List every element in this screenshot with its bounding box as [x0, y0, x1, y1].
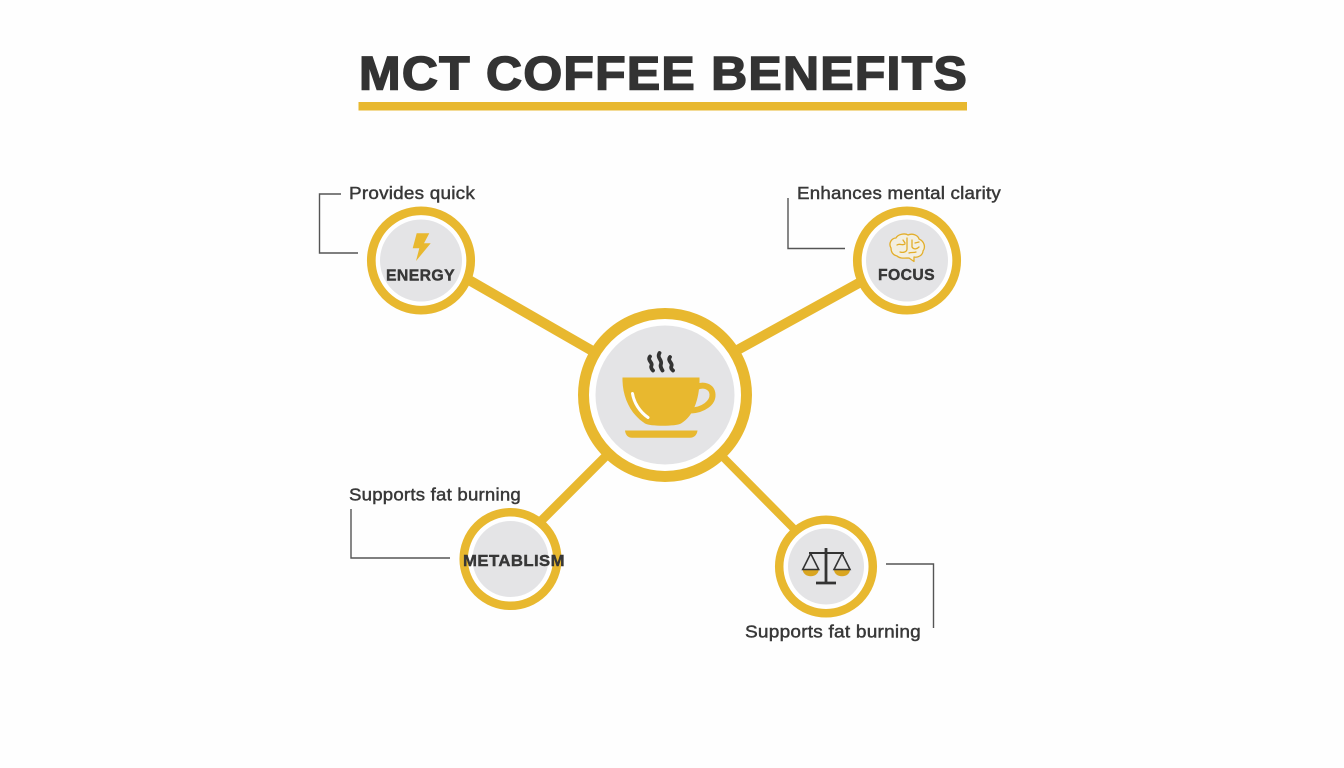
icon: steam [649, 353, 673, 370]
node: metabolism [463, 512, 565, 606]
callout: focus: Enhances mental clarity [797, 183, 1001, 203]
callout: metabolism: Supports fat burning [349, 484, 521, 504]
callout: balance [745, 564, 934, 642]
callout: metabolism [349, 484, 521, 558]
connecting spokes [462, 276, 868, 535]
node: focus [857, 211, 957, 310]
callout: balance: Supports fat burning [745, 622, 921, 642]
title: MCT COFFEE BENEFITS [359, 46, 968, 100]
label: focus: FOCUS [878, 267, 935, 284]
central coffee hub [584, 314, 746, 476]
label: energy: ENERGY [386, 268, 455, 284]
icon: balance scale [803, 548, 850, 583]
label: metabolism: METABLISM [463, 553, 565, 570]
title underline [358, 102, 967, 110]
callout: focus [788, 183, 1001, 248]
node: balance [779, 520, 873, 613]
callout: energy: Provides quick [349, 183, 475, 203]
node: energy [371, 211, 471, 310]
callout: energy [320, 183, 475, 253]
icon: lightning bolt [413, 233, 431, 261]
icon: brain [890, 234, 924, 262]
icon: coffee cup [622, 378, 713, 438]
